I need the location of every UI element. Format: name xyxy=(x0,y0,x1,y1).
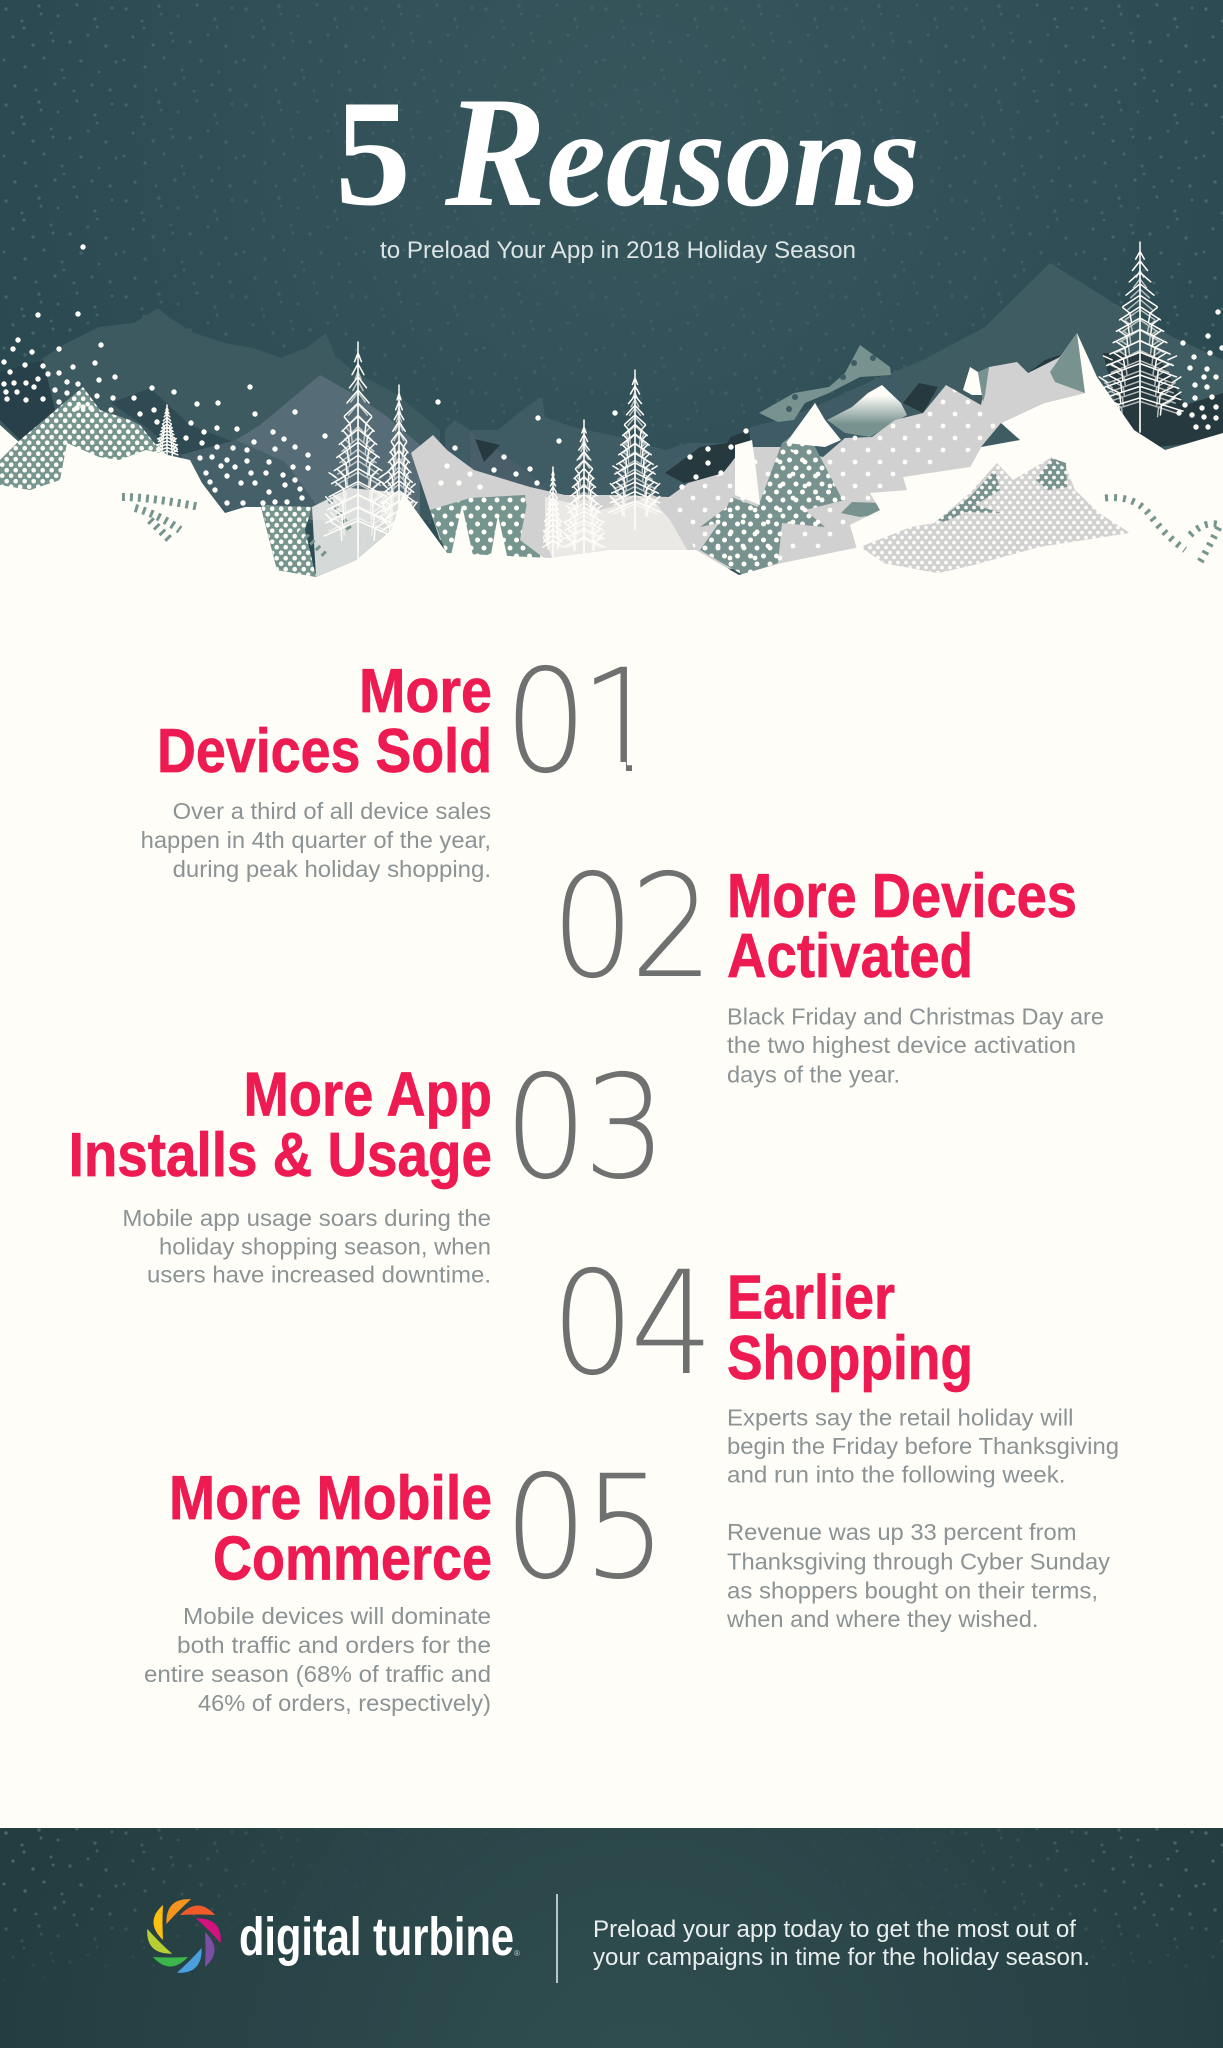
footer call to action: Preload your app today to get the most out of xyxy=(593,1916,1076,1943)
panel: footer xyxy=(0,1828,1223,2048)
heading 05 xyxy=(169,1464,492,1594)
body 04: Thanksgiving through Cyber Sunday xyxy=(727,1548,1111,1574)
body 01 xyxy=(141,798,491,882)
heading 04: Earlier xyxy=(727,1264,895,1332)
number 01: 01 xyxy=(504,639,659,805)
logo wordmark: digital turbine xyxy=(239,1907,514,1967)
body 04: begin the Friday before Thanksgiving xyxy=(727,1433,1119,1459)
body 03 xyxy=(122,1205,491,1288)
heading 01: More xyxy=(359,657,492,726)
title: Reasons xyxy=(444,65,920,240)
rock scraps left xyxy=(214,435,700,578)
back mountains xyxy=(0,263,1223,520)
panel: night sky header xyxy=(0,0,1223,640)
heading 03: More App xyxy=(244,1060,492,1130)
heading 02 xyxy=(727,862,1077,991)
body 03: users have increased downtime. xyxy=(147,1262,491,1288)
heading 02: More Devices xyxy=(727,862,1077,931)
reason 01 xyxy=(141,639,665,882)
heading 03 xyxy=(69,1060,492,1190)
dotted rock patch right xyxy=(860,457,1130,573)
heading 05: Commerce xyxy=(213,1524,492,1594)
heading 05: More Mobile xyxy=(169,1464,492,1533)
foreground snow xyxy=(0,443,1223,640)
right mid mountains and rock xyxy=(665,333,1223,575)
body 01: during peak holiday shopping. xyxy=(173,856,491,882)
body 01: happen in 4th quarter of the year, xyxy=(141,827,491,853)
body 02: the two highest device activation xyxy=(727,1032,1076,1058)
body 05 xyxy=(144,1603,491,1716)
logo wordmark: ® xyxy=(514,1949,520,1958)
icon: digital turbine logo ring xyxy=(141,1893,227,1979)
body 03: Mobile app usage soars during the xyxy=(122,1205,491,1231)
divider xyxy=(556,1894,558,1983)
body 05: both traffic and orders for the xyxy=(177,1632,491,1658)
snow slope right xyxy=(850,333,1223,570)
title: 5 xyxy=(335,69,411,237)
heading 03: Installs & Usage xyxy=(69,1121,492,1190)
falling snow dots xyxy=(4,247,1222,503)
body 05: 46% of orders, respectively) xyxy=(198,1690,491,1716)
number 05: 05 xyxy=(504,1445,662,1611)
speckled rock scraps on snow xyxy=(122,497,1220,562)
illustration: winter mountain landscape xyxy=(0,242,1223,640)
heading 01: Devices Sold xyxy=(157,717,492,786)
footer call to action xyxy=(593,1916,1090,1971)
heading 04 xyxy=(727,1264,973,1393)
footer call to action: your campaigns in time for the holiday season. xyxy=(593,1944,1090,1971)
body 04: and run into the following week. xyxy=(727,1461,1066,1487)
reason 03 xyxy=(69,1045,662,1288)
heading 04: Shopping xyxy=(727,1324,973,1393)
reason 05 xyxy=(144,1445,662,1716)
body 04: Experts say the retail holiday will xyxy=(727,1404,1074,1430)
heading 02: Activated xyxy=(727,922,973,991)
body 01: Over a third of all device sales xyxy=(173,798,491,824)
subtitle: to Preload Your App in 2018 Holiday Season xyxy=(380,237,856,264)
body 03: holiday shopping season, when xyxy=(159,1233,491,1259)
heading 01 xyxy=(157,657,492,786)
body 04 xyxy=(726,1404,1119,1632)
body 02: days of the year. xyxy=(727,1062,900,1088)
number 04: 04 xyxy=(551,1241,709,1407)
reason 04 xyxy=(551,1241,1119,1632)
body 04: as shoppers bought on their terms, xyxy=(727,1577,1098,1603)
reason 02 xyxy=(551,844,1104,1088)
body 05: entire season (68% of traffic and xyxy=(144,1661,491,1687)
body 02: Black Friday and Christmas Day are xyxy=(727,1004,1104,1030)
body 02 xyxy=(727,1004,1104,1088)
number 02: 02 xyxy=(551,844,709,1010)
body 05: Mobile devices will dominate xyxy=(183,1603,491,1629)
left mid mountains xyxy=(0,360,420,520)
body 04: when and where they wished. xyxy=(726,1606,1038,1632)
number 03: 03 xyxy=(504,1045,662,1211)
body 04: Revenue was up 33 percent from xyxy=(727,1519,1076,1545)
snowy pine trees xyxy=(156,242,1183,563)
